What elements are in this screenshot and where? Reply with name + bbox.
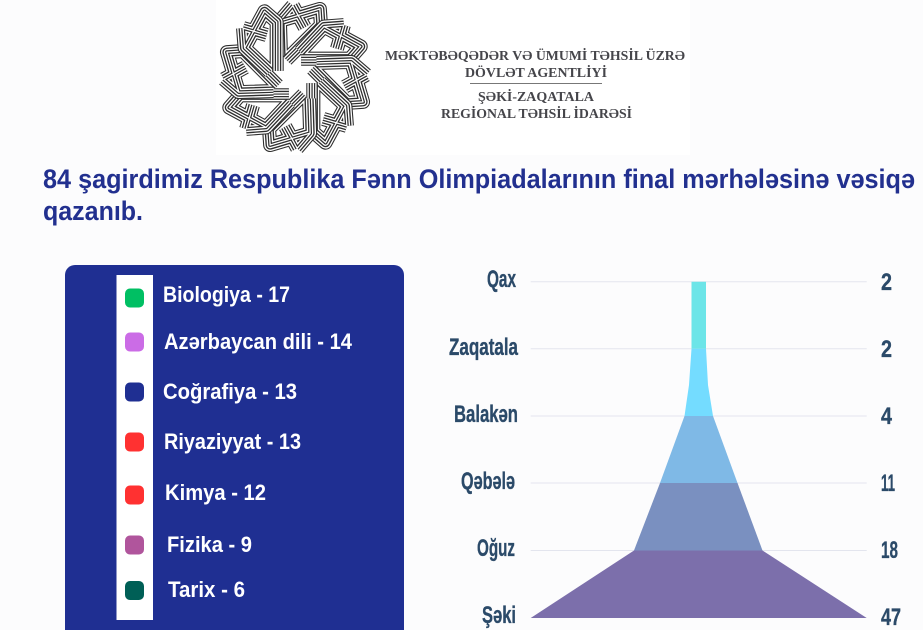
legend item: Coğrafiya: Coğrafiya - 13 bbox=[163, 379, 297, 404]
district labels: Zaqatala bbox=[449, 334, 518, 361]
legend item: Fizika: Fizika - 9 bbox=[167, 532, 252, 557]
title bbox=[43, 164, 915, 226]
agency name text: MƏKTƏBƏQƏDƏR VƏ ÜMUMİ TƏHSİL ÜZRƏ bbox=[385, 47, 685, 64]
icon: agency logo bbox=[224, 6, 366, 148]
district labels: Balakən bbox=[454, 401, 518, 428]
district values: 11 bbox=[881, 470, 895, 497]
legend item: Kimya: Kimya - 12 bbox=[165, 480, 266, 505]
legend item: Kimya bbox=[125, 480, 266, 505]
legend item: Fizika bbox=[125, 532, 252, 557]
agency name text: DÖVLƏT AGENTLİYİ bbox=[465, 64, 607, 81]
legend item: Tarix bbox=[125, 577, 245, 602]
district labels: Qəbələ bbox=[461, 468, 515, 495]
district values bbox=[881, 269, 901, 630]
district values: 18 bbox=[881, 537, 898, 564]
district labels: Oğuz bbox=[477, 535, 515, 562]
legend item: Azərbaycan dili: Azərbaycan dili - 14 bbox=[164, 329, 353, 354]
funnel segment: Qəbələ bbox=[634, 483, 762, 550]
district labels: Qax bbox=[487, 266, 516, 293]
funnel segment: Zaqatala bbox=[684, 349, 713, 416]
agency name text bbox=[385, 47, 685, 122]
agency name text: ŞƏKİ-ZAQATALA bbox=[478, 88, 595, 105]
district values: 2 bbox=[881, 336, 892, 363]
funnel chart bbox=[449, 266, 901, 630]
district values: 2 bbox=[881, 269, 892, 296]
header: logo background bbox=[216, 0, 690, 155]
legend item: Riyaziyyat: Riyaziyyat - 13 bbox=[164, 429, 301, 454]
district values: 4 bbox=[881, 403, 893, 430]
funnel segment: Oğuz bbox=[531, 550, 867, 618]
funnel segment: Balakən bbox=[660, 416, 738, 483]
legend item: Tarix: Tarix - 6 bbox=[168, 577, 245, 602]
agency name text: REGİONAL TƏHSİL İDARƏSİ bbox=[441, 105, 632, 122]
legend item: Biologiya bbox=[125, 282, 290, 308]
panel: subject legend bbox=[65, 265, 404, 630]
legend item: Biologiya: Biologiya - 17 bbox=[163, 282, 290, 307]
district labels bbox=[449, 266, 518, 629]
district labels: Şəki bbox=[482, 602, 516, 629]
funnel segment: Qax bbox=[692, 282, 706, 349]
title: qazanıb. bbox=[43, 196, 143, 226]
